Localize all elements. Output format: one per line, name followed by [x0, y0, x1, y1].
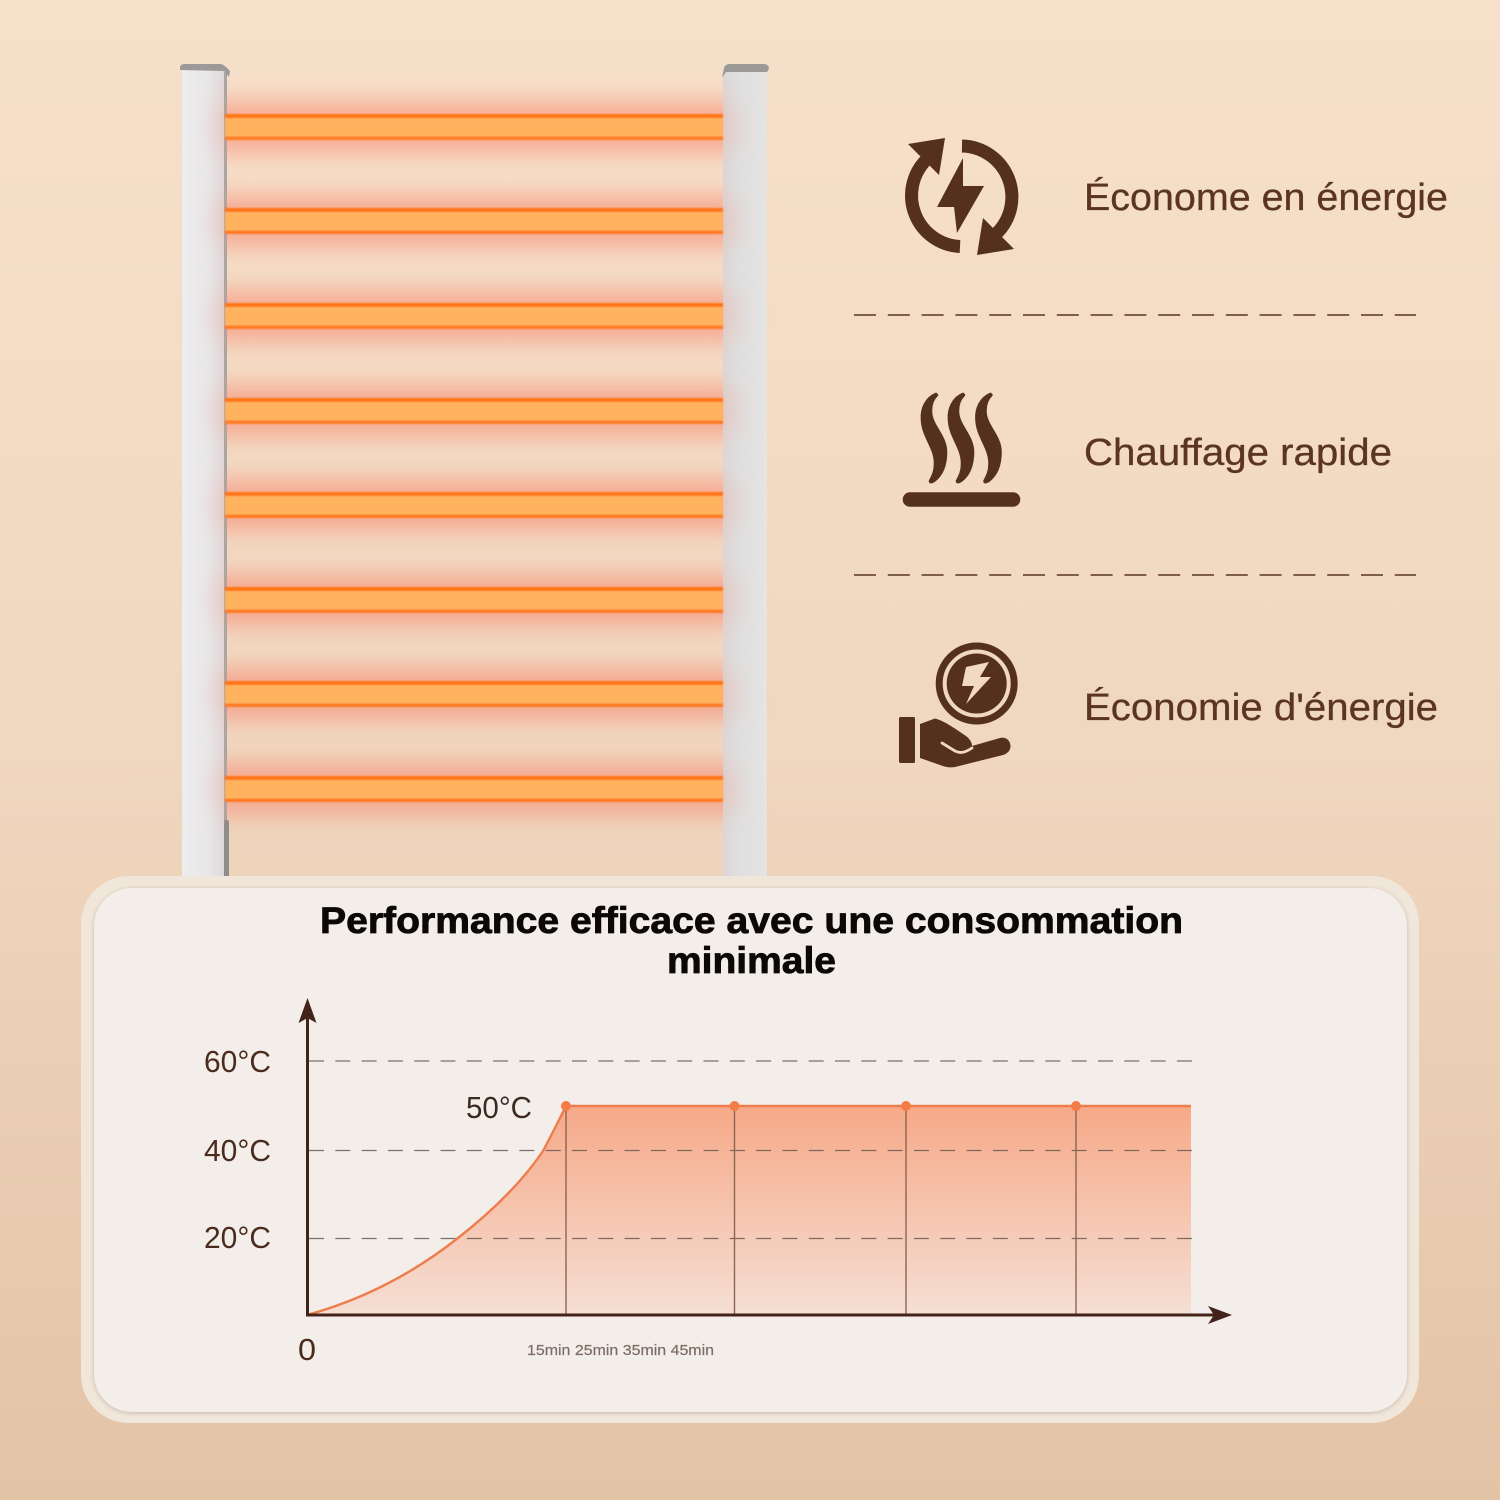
- right post: [722, 64, 769, 880]
- y axis labels: 0: [298, 1332, 316, 1367]
- heating curve area: [307, 1106, 1191, 1315]
- time markers: [566, 1106, 1076, 1315]
- divider two: [854, 574, 1416, 576]
- y axis: [298, 998, 316, 1316]
- area chart: [204, 998, 1232, 1367]
- y axis labels: 60°C: [204, 1044, 271, 1079]
- left post: [180, 64, 230, 880]
- y axis labels: [204, 1044, 316, 1367]
- temperature line: [307, 1106, 1191, 1315]
- heated bars: [225, 114, 723, 802]
- heading: minimale: [667, 940, 836, 981]
- x axis: [306, 1306, 1232, 1324]
- label: Économe en énergie: Économe en énergie: [1084, 176, 1448, 219]
- data points: [561, 1101, 1081, 1111]
- y axis labels: 20°C: [204, 1220, 271, 1255]
- panel: performance chart card: [81, 876, 1419, 1423]
- peak label: 50°C: [466, 1090, 532, 1125]
- towel radiator: [180, 64, 769, 880]
- icon: hand holding energy: [899, 646, 1014, 767]
- heading: [320, 900, 1183, 981]
- grid lines: [309, 1061, 1192, 1238]
- icon: heat waves: [904, 394, 1019, 506]
- y axis labels: 40°C: [204, 1133, 271, 1168]
- label: Chauffage rapide: Chauffage rapide: [1084, 432, 1392, 474]
- heat glow behind posts: [205, 104, 745, 812]
- heat glow on post edges: [212, 104, 738, 812]
- time labels: 15min 25min 35min 45min: [527, 1342, 714, 1359]
- divider one: [854, 314, 1416, 316]
- heading: Performance efficace avec une consommation: [320, 900, 1183, 941]
- label: Économie d'énergie: Économie d'énergie: [1084, 686, 1438, 729]
- icon: energy cycle: [908, 138, 1014, 255]
